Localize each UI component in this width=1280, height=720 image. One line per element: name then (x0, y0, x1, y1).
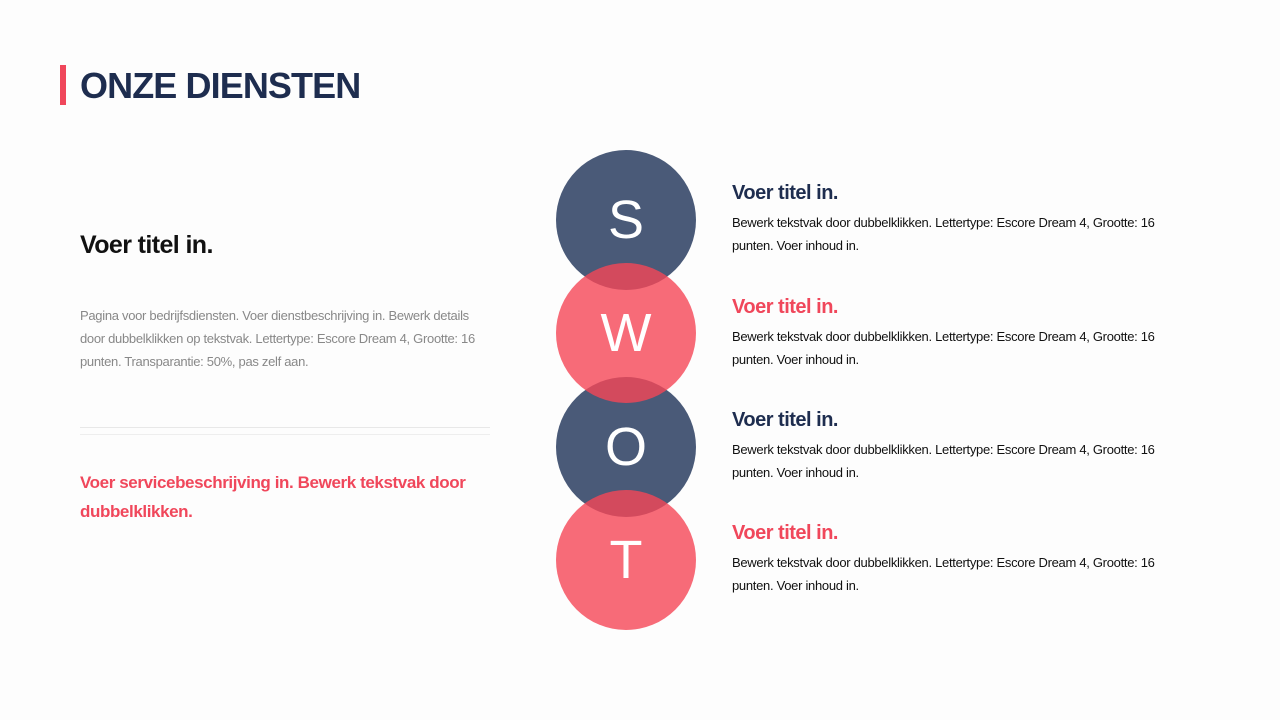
item O: Voer titel in. (732, 409, 838, 431)
item W: Voer titel in. (732, 296, 838, 318)
item S: Voer titel in. (732, 182, 838, 204)
item W: Bewerk tekstvak door dubbelklikken. Lettertype: Escore Dream 4, Grootte: 16 punten. Voer inhoud in. (732, 329, 1155, 367)
item O (732, 409, 1155, 480)
SWOT circles (556, 150, 696, 630)
left heading: Voer titel in. (80, 231, 213, 259)
item T: Voer titel in. (732, 522, 838, 544)
SWOT circles: O (605, 417, 647, 477)
item T: Bewerk tekstvak door dubbelklikken. Lettertype: Escore Dream 4, Grootte: 16 punten. Voer inhoud in. (732, 555, 1155, 593)
left description: Pagina voor bedrijfsdiensten. Voer dienstbeschrijving in. Bewerk details door dubbelklikken op tekstvak. Lettertype: Escore Dream 4, Grootte: 16 punten. Transparantie: 50%, pas zelf aan. (80, 308, 475, 369)
item S (732, 182, 1155, 253)
service description: Voer servicebeschrijving in. Bewerk tekstvak door dubbelklikken. (80, 473, 465, 521)
item T (732, 522, 1155, 593)
item S: Bewerk tekstvak door dubbelklikken. Lettertype: Escore Dream 4, Grootte: 16 punten. Voer inhoud in. (732, 215, 1155, 253)
SWOT circles: T (610, 530, 642, 590)
title: ONZE DIENSTEN (80, 65, 360, 106)
accent bar (60, 65, 66, 105)
item O: Bewerk tekstvak door dubbelklikken. Lettertype: Escore Dream 4, Grootte: 16 punten. Voer inhoud in. (732, 442, 1155, 480)
SWOT circles: W (601, 303, 652, 363)
item W (732, 296, 1155, 367)
SWOT circles: S (608, 190, 644, 250)
